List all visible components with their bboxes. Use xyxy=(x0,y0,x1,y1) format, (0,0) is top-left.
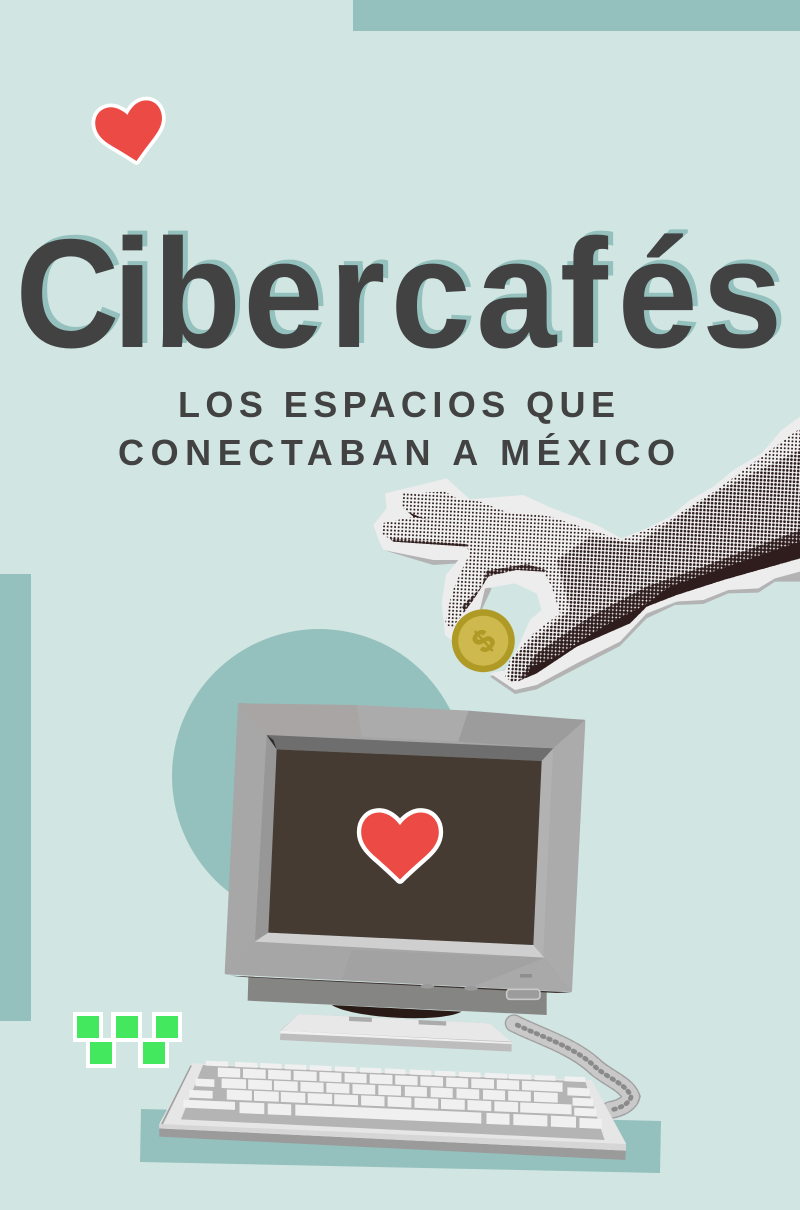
icon: small heart xyxy=(92,98,169,167)
green pixel squares xyxy=(73,1012,182,1068)
subtitle: CONECTABAN A MÉXICO xyxy=(118,432,675,473)
hand with coin xyxy=(373,417,800,694)
subtitle xyxy=(118,384,675,473)
icon: heart on screen xyxy=(361,813,439,879)
title: Cibercafés xyxy=(20,203,787,376)
keyboard xyxy=(159,1060,626,1160)
stand xyxy=(332,1005,462,1018)
teal keyboard mat xyxy=(140,1109,661,1173)
teal circle xyxy=(172,629,466,923)
screen bezel xyxy=(255,735,553,958)
monitor xyxy=(225,703,585,1018)
keys xyxy=(183,1060,602,1129)
top teal bar xyxy=(353,0,800,31)
monitor frame xyxy=(226,704,584,991)
cable xyxy=(514,1023,631,1110)
icon: coin: $ xyxy=(465,621,502,660)
hand xyxy=(373,417,800,694)
title: Cibercafés xyxy=(15,207,782,380)
monitor shadow line xyxy=(230,976,572,993)
monitor base plate xyxy=(280,1014,512,1052)
left teal bar xyxy=(0,574,31,1021)
icon: coin xyxy=(452,609,515,672)
subtitle: LOS ESPACIOS QUE xyxy=(178,384,615,425)
screen xyxy=(268,749,542,945)
monitor buttons xyxy=(421,974,540,999)
computer xyxy=(159,703,631,1160)
